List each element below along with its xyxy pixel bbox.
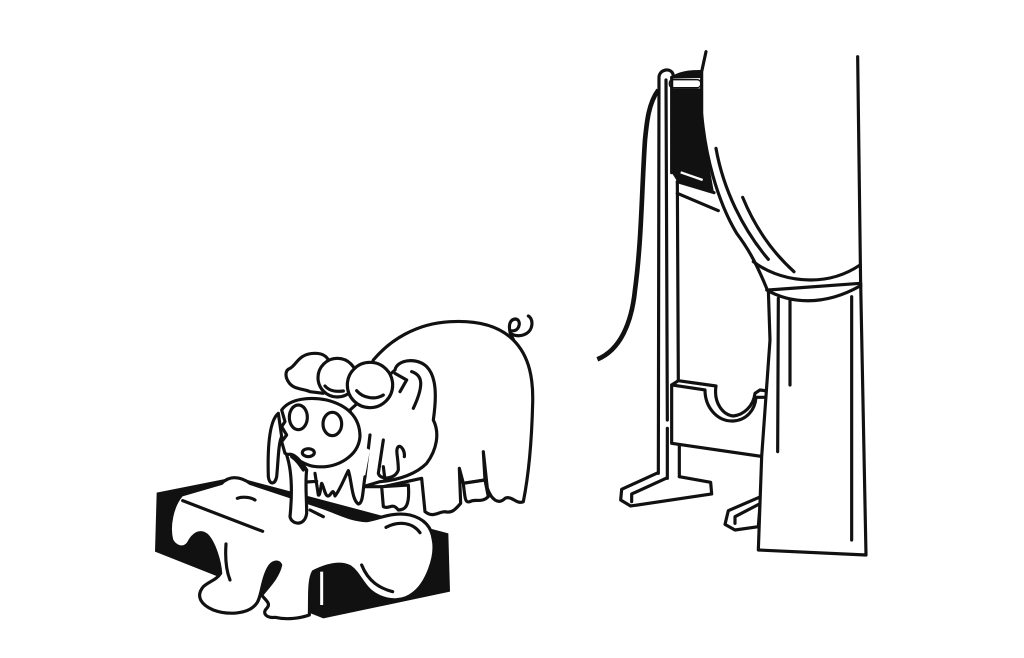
pig head lump left	[286, 353, 330, 393]
cable	[597, 90, 658, 359]
dark panel	[672, 88, 714, 193]
trough drape folds	[183, 497, 420, 592]
pig head lump middle	[318, 358, 357, 397]
pig mouth	[302, 449, 314, 457]
right foot	[725, 497, 761, 530]
pig tail	[509, 316, 532, 339]
pig nostrils	[289, 405, 307, 430]
pig head lump right	[347, 362, 393, 408]
pig snout	[282, 398, 360, 467]
pig right ear and shoulder	[350, 361, 437, 487]
right edge	[858, 57, 861, 287]
trough drape	[170, 478, 434, 619]
pig ear tip	[395, 373, 407, 392]
pig small rear leg	[463, 480, 488, 502]
stock notch	[672, 385, 767, 421]
pig chest drips	[307, 443, 370, 504]
stock board	[672, 381, 767, 457]
drool	[287, 454, 307, 523]
trough base	[155, 477, 450, 618]
robe lines	[778, 297, 852, 540]
pig shoulder lines	[365, 372, 421, 480]
illustration: pig eating at trough	[155, 316, 533, 619]
post	[658, 70, 679, 478]
pig front leg	[382, 485, 409, 510]
illustration: guillotine and curtain	[597, 52, 866, 555]
pig torso and rear legs	[357, 321, 533, 515]
top rail	[673, 71, 702, 78]
left foot	[621, 473, 712, 506]
curtain edges	[702, 52, 767, 288]
robe lower	[758, 283, 866, 555]
pig left ear	[268, 413, 282, 483]
crossbar	[677, 182, 718, 211]
icon: pig body	[268, 316, 533, 515]
curtain folds	[716, 148, 860, 301]
